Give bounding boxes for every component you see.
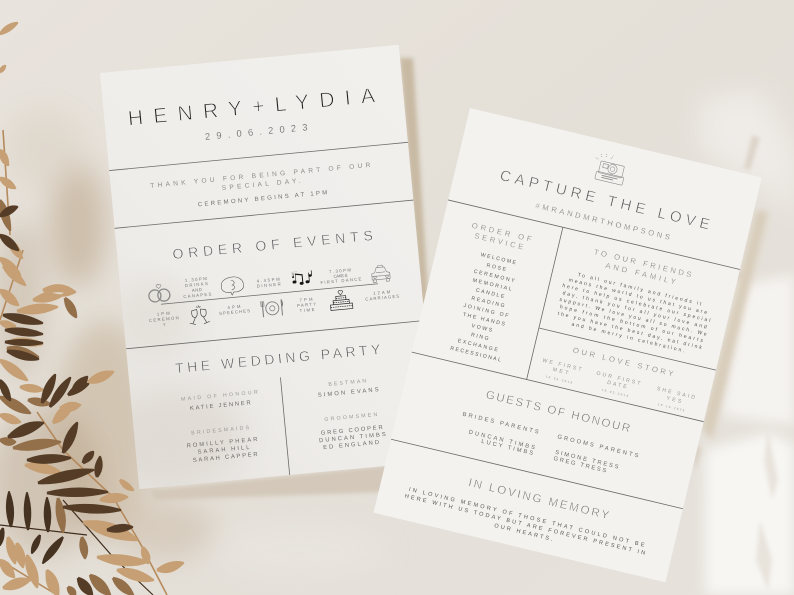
title: Henry + Lydia: HENRY+LYDIA	[127, 84, 376, 131]
icon: wedding rings	[148, 283, 170, 302]
order of service list: SERVICE	[474, 231, 524, 251]
order of service list: CANDLE	[475, 288, 505, 300]
our love story: SHE SAID	[656, 386, 696, 401]
thank you message: CEREMONY BEGINS AT 1PM	[198, 190, 328, 208]
order of service list: MEMORIAL	[472, 278, 512, 293]
thank you message: SPECIAL DAY.	[222, 178, 301, 192]
our love story: 10.02.2019	[601, 388, 629, 398]
timeline labels below the line: CEREMON	[149, 315, 179, 323]
timeline labels above the line: 7.30PM	[329, 267, 352, 274]
order of service list: EXCHANGE	[457, 338, 499, 354]
bride's party list: ROMILLY PHEAR	[186, 437, 258, 449]
bride's party list: SARAH HILL	[197, 445, 250, 456]
timeline labels above the line: CAKE &	[333, 273, 348, 279]
our love story: OUR LOVE STORY	[572, 346, 674, 378]
stems	[0, 130, 167, 595]
groom's party list: DUNCAN TIMBS	[319, 432, 386, 444]
guests of honour: GREG TRESS	[553, 456, 607, 474]
groom's party list	[314, 377, 387, 451]
groom's party list: ED ENGLAND	[323, 440, 379, 451]
bride's party list: SARAH CAPPER	[193, 452, 258, 464]
in loving memory	[402, 463, 653, 564]
guests of honour: GUESTS OF HONOUR	[485, 389, 631, 435]
bride's party list: BRIDESMAIDS	[191, 425, 250, 436]
to our friends and family message: the you have the best day, eat drink	[557, 311, 703, 351]
order of service list: RECESSIONAL	[450, 346, 502, 363]
groom's party list: SIMON EVANS	[318, 387, 379, 399]
card shadows	[150, 58, 768, 500]
order of service list: ORDER OF	[471, 221, 533, 244]
to our friends and family message	[553, 242, 721, 358]
timeline labels above the line: AND	[192, 287, 202, 293]
order of service list: VOWS	[471, 323, 493, 334]
hashtag: #MRANDMRTHOMPSONS	[535, 201, 671, 242]
our love story: 10.10.2023	[658, 402, 685, 412]
timeline labels below the line: SPEECHES	[219, 308, 250, 316]
guests of honour: DUNCAN TIMBS	[468, 430, 536, 451]
timeline labels below the line: TIME	[299, 307, 315, 313]
timeline labels below the line: 1PM	[157, 310, 170, 317]
bride's party list	[181, 390, 264, 465]
to our friends and family message: day, thank you for all your love and	[562, 290, 707, 330]
left card: main programme	[100, 45, 424, 489]
section dividers	[391, 200, 740, 509]
order of service list: CEREMONY	[473, 269, 516, 284]
date: 29.06.2023	[205, 122, 308, 143]
our love story: DATE	[606, 380, 628, 390]
to our friends and family message: support. We love you all so much. We	[559, 297, 707, 338]
bride's party list: KATIE JENNER	[190, 400, 251, 412]
white fabric ribbon on the right	[692, 90, 794, 595]
thank you message	[150, 162, 373, 213]
title: capture the love: CAPTURE THE LOVE	[498, 167, 711, 233]
groom's party list: GREG COOPER	[321, 425, 383, 437]
timeline labels above the line: 1.30PM	[185, 276, 207, 283]
icon: taxi	[371, 264, 390, 283]
timeline labels above the line: DINNER	[257, 281, 281, 289]
our love story	[538, 339, 700, 414]
in loving memory: IN LOVING MEMORY	[467, 477, 610, 522]
icon: instant camera	[590, 150, 629, 185]
order of service list	[442, 221, 533, 364]
our love story: YES	[666, 396, 682, 405]
to our friends and family message: TO OUR FRIENDS	[593, 247, 692, 279]
order of service list: RING	[470, 332, 489, 342]
icon: plate and cutlery	[261, 299, 284, 317]
fern fronds	[0, 23, 183, 595]
timeline labels above the line	[182, 261, 362, 299]
to our friends and family message: To all our family and friends it	[577, 272, 703, 308]
thank you message: THANK YOU FOR BEING PART OF OUR	[150, 162, 371, 190]
our love story: 10.06.2018	[545, 374, 573, 385]
icon: bouquet	[220, 276, 244, 296]
bride's party list: MAID OF HONOUR	[181, 390, 258, 403]
tan leaflets	[0, 23, 183, 595]
timeline labels below the line: Y	[163, 322, 166, 327]
guests of honour: LUCY TIMBS	[481, 439, 534, 457]
timeline: order of events	[145, 258, 400, 329]
dark leaflets	[0, 207, 132, 595]
mid brown leaflets	[0, 200, 133, 595]
timeline labels above the line: DRINKS	[185, 281, 208, 288]
icon: wedding cake	[329, 290, 353, 311]
our love story: WE FIRST	[542, 358, 583, 373]
soft shadow falling on the card	[124, 286, 243, 484]
order of service list: READING	[471, 296, 505, 309]
to our friends and family message: here to help us celebrate our special	[562, 283, 711, 324]
timeline labels above the line: FIRST DANCE	[320, 276, 362, 285]
icon: music notes	[292, 270, 313, 286]
in loving memory: HERE WITH US TODAY BUT ARE FOREVER PRESENT IN	[404, 494, 646, 557]
order of service list: ROSE	[486, 263, 507, 273]
order of service list: THE HANDS	[462, 312, 506, 328]
order of service list: WELCOME	[480, 252, 517, 266]
to our friends and family message: and be merry in celebration.	[571, 322, 685, 354]
timeline labels below the line: CARRIAGES	[365, 294, 399, 302]
to our friends and family message: means the world to us that you are	[568, 277, 708, 316]
timeline labels below the line	[148, 288, 400, 328]
timeline labels below the line: PARTY	[297, 301, 316, 308]
our love story: MET	[552, 367, 570, 377]
timeline labels below the line: 7PM	[299, 296, 313, 303]
to our friends and family message: AND FAMILY	[605, 261, 677, 286]
timeline labels below the line: 12AM	[373, 289, 391, 296]
timeline labels above the line: CANAPES	[183, 292, 212, 299]
section dividers	[109, 142, 438, 489]
to our friends and family message: hope from the bottom of our hearts	[559, 304, 704, 344]
heading: the wedding party: THE WEDDING PARTY	[174, 341, 382, 376]
guests of honour: BRIDES PARENTS	[462, 412, 539, 436]
timeline labels below the line: 4PM	[227, 304, 241, 310]
in loving memory: OUR HEARTS.	[493, 523, 554, 543]
groom's party list: BESTMAN	[328, 378, 367, 388]
icon: champagne glasses	[188, 304, 210, 325]
our love story: OUR FIRST	[596, 371, 642, 387]
order of service list: JOINING OF	[463, 303, 509, 319]
heading: order of events: ORDER OF EVENTS	[172, 227, 373, 262]
timeline labels above the line: 4.45PM	[257, 276, 280, 284]
right card: capture the love	[374, 108, 762, 582]
guests of honour	[457, 385, 645, 481]
guests of honour: GROOMS PARENTS	[557, 434, 639, 459]
in loving memory: IN LOVING MEMORY OF THOSE THAT COULD NOT BE	[408, 487, 645, 549]
guests of honour: SIMONE TRESS	[554, 450, 619, 471]
groom's party list: GROOMSMEN	[324, 412, 378, 423]
